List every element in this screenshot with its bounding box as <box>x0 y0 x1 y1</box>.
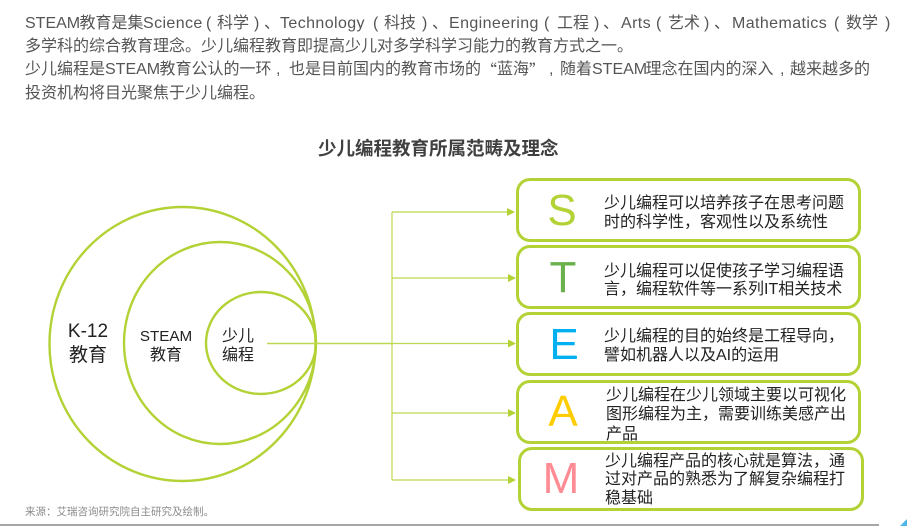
source note: 来源：艾瑞咨询研究院自主研究及绘制。 <box>25 506 214 518</box>
intro text: ) <box>704 15 709 32</box>
intro text: ) <box>254 15 259 32</box>
text A <box>606 386 846 443</box>
card: M <box>518 447 864 511</box>
intro text: ( <box>656 15 661 32</box>
intro text: Arts <box>621 15 651 32</box>
intro text: 艺术 <box>668 15 700 32</box>
title: 少儿编程教育所属范畴及理念 <box>318 138 559 159</box>
intro text: ( <box>834 15 839 32</box>
intro text <box>25 14 890 102</box>
letter M: M <box>543 454 579 502</box>
intro text: 也是目前国内的教育市场的 <box>289 61 481 78</box>
label: K-12: K-12 <box>68 321 108 342</box>
intro text: STEAM <box>25 15 80 32</box>
text A: 产品 <box>606 426 638 443</box>
connector arrows <box>267 208 516 484</box>
circle: STEAM <box>124 242 316 444</box>
letter T: T <box>550 253 576 302</box>
label: kids coding: 少儿 <box>222 328 254 345</box>
text T <box>604 262 844 298</box>
label: STEAM <box>140 328 192 364</box>
intro text: 蓝海 <box>497 61 529 78</box>
intro text: “ <box>481 57 497 81</box>
intro text: 、 <box>432 15 448 32</box>
corner accent <box>900 519 907 526</box>
intro text: 教育公认的一环 <box>160 61 272 78</box>
intro text: 教育是集 <box>80 15 144 32</box>
letter S: S <box>547 186 577 235</box>
card: E <box>516 312 861 376</box>
label: K-12: 教育 <box>69 345 107 366</box>
text S: 时的科学性，客观性以及系统性 <box>604 214 828 231</box>
label: kids coding <box>222 328 254 364</box>
letter A: A <box>548 386 578 436</box>
intro text: 理念在国内的深入 <box>646 61 774 78</box>
circle: K-12 <box>50 207 316 481</box>
intro text: 工程 <box>557 15 589 32</box>
intro text: Science <box>143 15 203 32</box>
text S: 少儿编程可以培养孩子在思考问题 <box>604 194 844 212</box>
intro text: Mathematics <box>732 15 827 32</box>
label: STEAM: 教育 <box>150 347 182 364</box>
text E: 少儿编程的目的始终是工程导向， <box>604 328 844 344</box>
intro text: , <box>549 61 553 78</box>
text M: 稳基础 <box>605 490 653 507</box>
text M: 过对产品的熟悉为了解复杂编程打 <box>605 471 845 488</box>
letter E: E <box>549 320 579 369</box>
text T: 言，编程软件等一系列IT相关技术 <box>604 281 842 298</box>
text S <box>604 194 844 231</box>
text A: 图形编程为主，需要训练美感产出 <box>606 406 846 423</box>
card: T <box>516 245 861 309</box>
intro text: STEAM <box>592 61 647 78</box>
intro text: 多学科的综合教育理念。少儿编程教育即提高少儿对多学科学习能力的教育方式之一。 <box>25 38 633 55</box>
intro text: ) <box>594 15 599 32</box>
intro text: ( <box>544 15 549 32</box>
label: K-12 <box>68 321 108 366</box>
label: STEAM: STEAM <box>140 328 192 345</box>
intro text: 随着 <box>560 61 592 78</box>
text T: 少儿编程可以促使孩子学习编程语 <box>604 263 844 280</box>
intro text: Engineering <box>449 15 539 32</box>
text M: 少儿编程产品的核心就是算法，通 <box>605 453 845 470</box>
intro text: , <box>276 61 280 78</box>
intro text: 投资机构将目光聚焦于少儿编程。 <box>25 85 265 102</box>
circle: kids coding <box>206 292 316 394</box>
intro text: ) <box>422 15 427 32</box>
intro text: ) <box>885 15 890 32</box>
intro text: 科学 <box>217 15 249 32</box>
card: A <box>516 380 861 444</box>
intro text: 数学 <box>846 15 878 32</box>
label: kids coding: 编程 <box>222 347 254 364</box>
text E: 譬如机器人以及AI的运用 <box>604 346 779 364</box>
intro text: 科技 <box>384 15 416 32</box>
intro text: 、 <box>264 15 280 32</box>
intro text: Technology <box>280 15 365 32</box>
intro text: 、 <box>714 15 730 32</box>
text M <box>605 452 845 507</box>
footer rule <box>0 524 879 526</box>
intro text: 越来越多的 <box>790 61 870 78</box>
intro text: , <box>780 61 784 78</box>
intro text: ” <box>529 57 545 81</box>
text A: 少儿编程在少儿领域主要以可视化 <box>606 387 846 404</box>
intro text: 少儿编程是 <box>25 61 105 78</box>
intro text: 、 <box>603 15 619 32</box>
card: S <box>516 178 861 242</box>
intro text: STEAM <box>105 61 160 78</box>
intro text: ( <box>373 15 378 32</box>
text E <box>604 327 844 364</box>
intro text: ( <box>206 15 211 32</box>
